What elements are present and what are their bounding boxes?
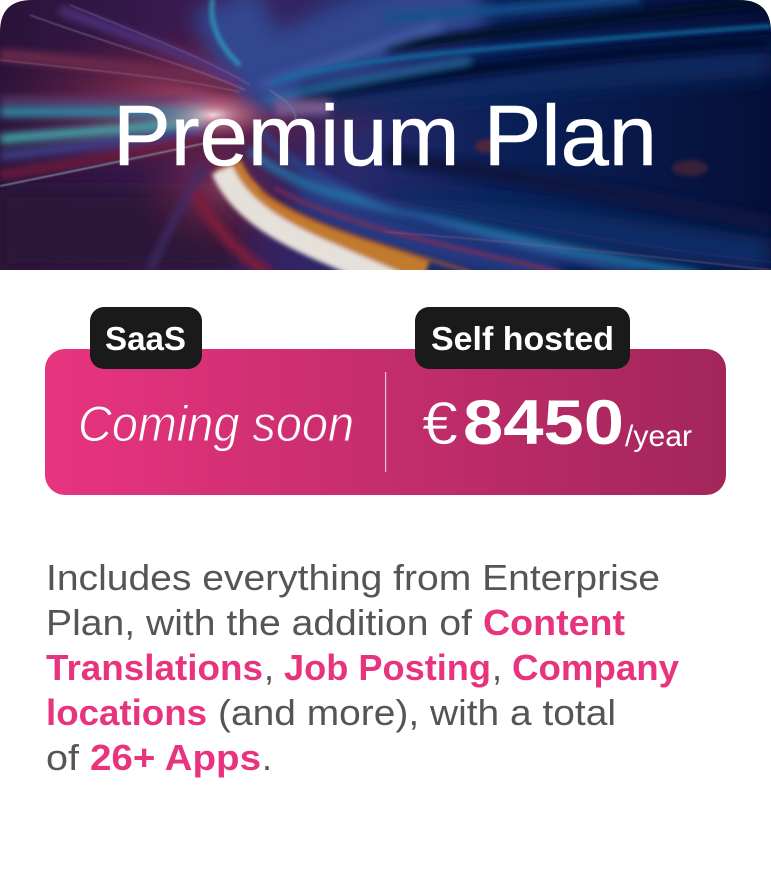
description text xyxy=(46,557,679,778)
description text: locations xyxy=(46,692,207,733)
panel background xyxy=(45,349,726,495)
description text: , xyxy=(492,647,502,688)
badge: Self hosted: Self hosted xyxy=(431,320,614,357)
description text: of xyxy=(46,737,80,778)
banner background: light-speed tunnel xyxy=(0,0,771,282)
description text: Includes everything from Enterprise xyxy=(46,557,660,598)
description text: 26+ Apps xyxy=(90,737,261,778)
description text: Plan, with the addition of xyxy=(46,602,473,643)
description text: Translations xyxy=(46,647,263,688)
description text: . xyxy=(262,737,272,778)
description text: (and more), with a total xyxy=(218,692,616,733)
description text: Content xyxy=(483,602,625,643)
badge: SaaS: SaaS xyxy=(105,320,186,357)
badge: SaaS xyxy=(90,307,202,369)
price panel xyxy=(45,307,726,495)
description text: , xyxy=(264,647,274,688)
self hosted price xyxy=(422,388,692,458)
banner xyxy=(0,0,771,282)
self hosted price: /year xyxy=(625,420,692,453)
SaaS price: coming soon: Coming soon xyxy=(78,396,354,452)
self hosted price: 8450 xyxy=(463,388,624,458)
description text: Company xyxy=(512,647,679,688)
title: Premium Plan xyxy=(113,89,657,184)
badge: Self hosted xyxy=(415,307,630,369)
description text: Job Posting xyxy=(284,647,491,688)
self hosted price: € xyxy=(422,390,458,457)
